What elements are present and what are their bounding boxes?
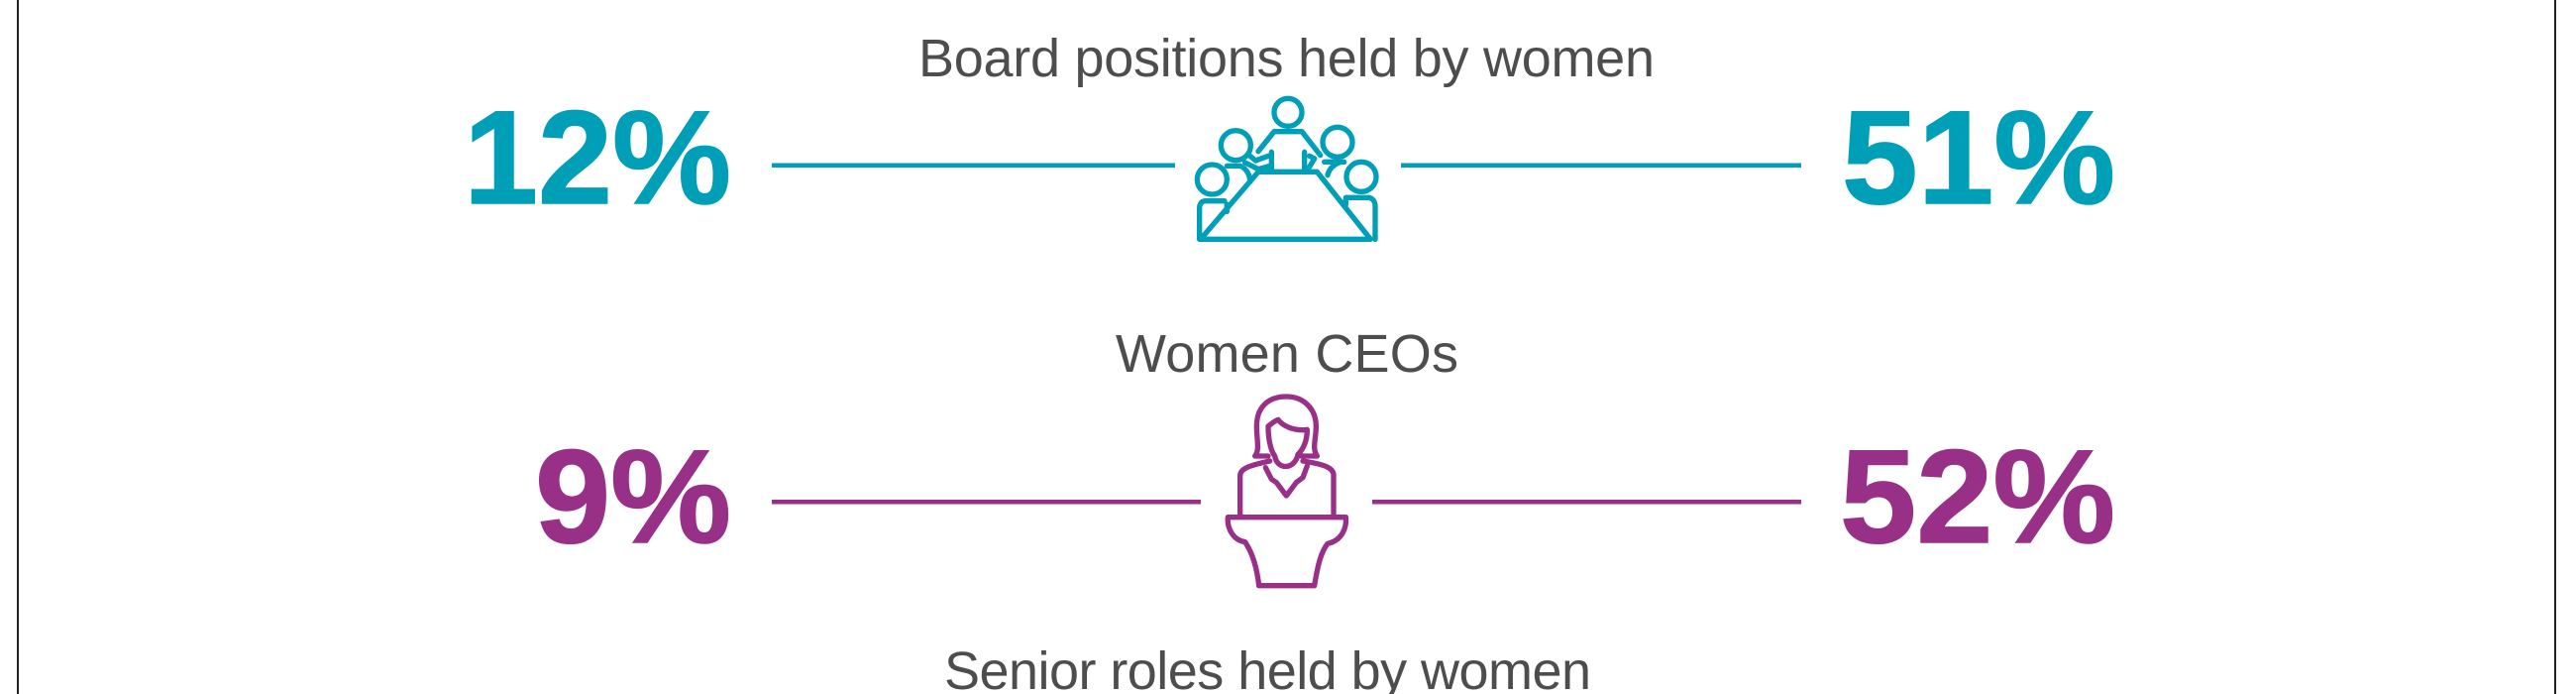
left frame border xyxy=(17,0,19,694)
connector line left xyxy=(772,163,1175,168)
heading: women CEOs: Women CEOs xyxy=(1116,324,1458,384)
stat: 12%: 12% xyxy=(464,84,731,232)
row: women CEOs xyxy=(535,397,2115,586)
connector line right xyxy=(1372,500,1801,504)
stat: 9%: 9% xyxy=(535,423,731,571)
icon: woman at podium xyxy=(1228,397,1345,586)
heading: board positions: Board positions held by women xyxy=(918,29,1655,88)
icon: boardroom table xyxy=(1197,98,1376,239)
row: board positions held by women xyxy=(464,84,2115,239)
connector line right xyxy=(1401,163,1801,168)
right frame border xyxy=(2554,0,2556,694)
stat: 51%: 51% xyxy=(1842,84,2115,232)
stat: 52%: 52% xyxy=(1840,423,2115,571)
connector line left xyxy=(772,500,1201,504)
